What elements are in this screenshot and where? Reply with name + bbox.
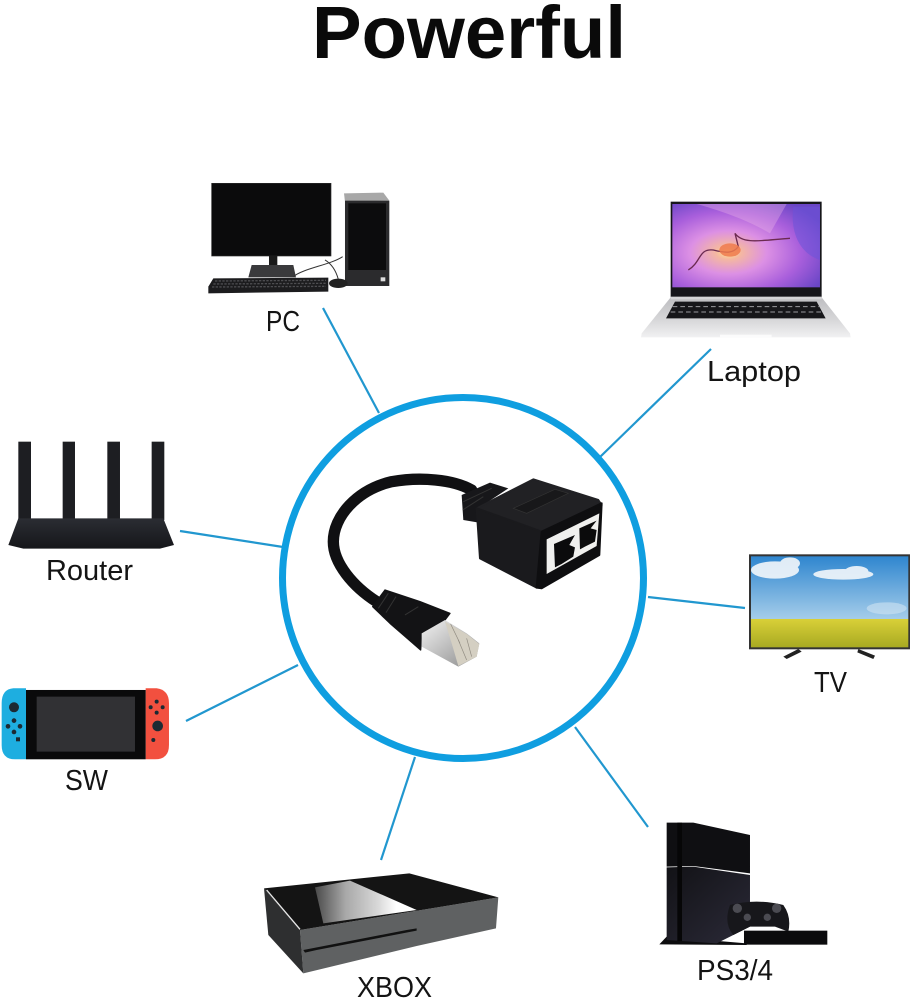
cables	[293, 257, 343, 279]
label: Router: Router	[46, 555, 133, 587]
clouds	[751, 557, 873, 580]
controller	[727, 902, 789, 935]
RJ45 metal plug	[422, 620, 479, 667]
sky	[751, 556, 908, 619]
device: laptop	[641, 202, 851, 337]
stands	[783, 649, 875, 659]
right controller	[146, 688, 169, 759]
device: XBOX console	[264, 873, 498, 973]
bezel	[749, 554, 910, 649]
camera	[744, 931, 827, 945]
label: TV: TV	[814, 667, 848, 699]
console upper	[667, 823, 750, 873]
keyboard	[666, 302, 826, 318]
monitor	[212, 183, 331, 256]
device: PS4 console	[659, 823, 827, 945]
router body	[8, 518, 174, 549]
label: PS3/4: PS3/4	[697, 955, 773, 987]
edge highlight	[267, 890, 300, 929]
device: game handheld	[2, 688, 169, 759]
device: PC	[208, 183, 389, 293]
cable	[333, 479, 472, 602]
connector lines	[180, 308, 745, 860]
side face	[264, 888, 303, 973]
console body	[26, 690, 146, 759]
top face	[264, 873, 498, 930]
central ring	[282, 398, 644, 758]
screen	[672, 204, 820, 287]
hinge notch	[720, 335, 772, 337]
central product: ethernet splitter adapter	[333, 479, 602, 667]
label: SW: SW	[65, 765, 109, 797]
lid and bezel	[671, 202, 822, 297]
dual ports	[547, 513, 599, 574]
field	[751, 619, 908, 647]
housing label recess	[513, 489, 568, 513]
console base	[659, 937, 747, 945]
device: router	[8, 442, 174, 549]
label: Laptop: Laptop	[707, 356, 801, 388]
label: PC: PC	[266, 306, 300, 338]
left controller	[2, 688, 26, 759]
keyboard	[208, 278, 328, 293]
buttons and sticks	[6, 700, 165, 742]
tower	[344, 193, 389, 202]
console lower	[667, 867, 750, 943]
console screen	[37, 697, 135, 752]
device: TV	[749, 554, 910, 659]
glossy band	[315, 881, 417, 923]
front face	[300, 897, 498, 973]
splitter strain relief	[462, 483, 508, 522]
laptop base	[641, 297, 851, 337]
splitter housing	[477, 479, 602, 532]
disc slot	[303, 928, 417, 953]
antennas	[18, 442, 164, 520]
mouse	[329, 279, 348, 288]
RJ45 boot	[373, 590, 450, 650]
